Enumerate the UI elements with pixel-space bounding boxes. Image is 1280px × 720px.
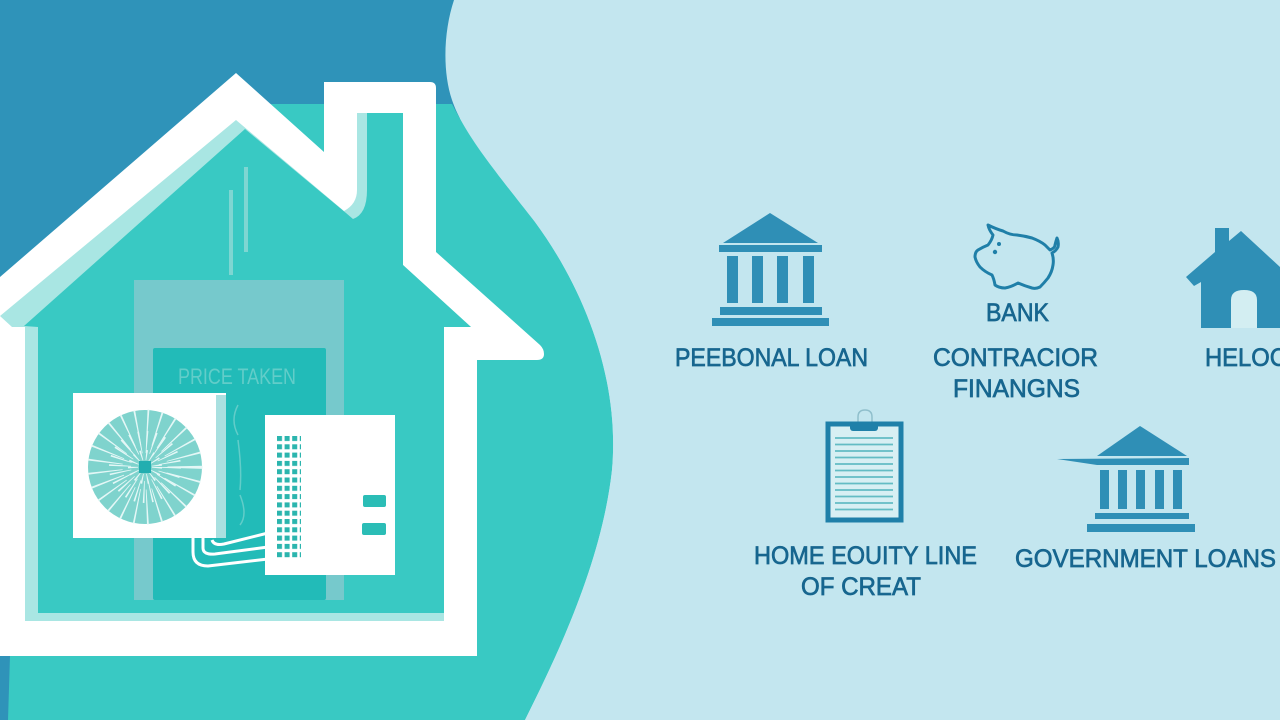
label: contractor financing: CONTRACIOR xyxy=(933,344,1098,372)
icon: piggy bank xyxy=(975,225,1058,288)
fan xyxy=(88,410,202,524)
house interior xyxy=(24,113,471,613)
indoor unit xyxy=(265,415,395,575)
indoor body xyxy=(265,415,395,575)
label: contractor financing xyxy=(933,344,1098,403)
label: personal loan: PEEBONAL LOAN xyxy=(675,344,868,372)
wall panel xyxy=(134,280,344,600)
roof inner shadow xyxy=(0,113,471,621)
background: light blob edge xyxy=(445,0,700,720)
label: government loans: GOVERNMENT LOANS xyxy=(1015,545,1276,573)
background: dark blue corner xyxy=(0,0,460,720)
icon: bank xyxy=(712,213,829,326)
label: bank: BANK xyxy=(986,299,1049,327)
label: home equity line of credit: OF CREAT xyxy=(801,573,921,601)
background: teal blob xyxy=(0,104,613,720)
house outline xyxy=(0,73,544,656)
icon: government bank xyxy=(1057,426,1195,532)
vent lines xyxy=(229,167,248,275)
pipes xyxy=(193,533,268,566)
vent dots xyxy=(277,436,301,560)
outdoor unit xyxy=(73,393,226,538)
buttons xyxy=(362,495,386,535)
label: home equity line of credit xyxy=(754,542,977,601)
house illustration xyxy=(0,73,544,656)
icon: clipboard xyxy=(828,410,901,520)
label: home equity line of credit: HOME EOUITY LINE xyxy=(754,542,977,570)
label: contractor financing: FINANGNS xyxy=(953,375,1080,403)
display squiggles xyxy=(234,405,244,525)
icon: house xyxy=(1186,228,1280,328)
unit side xyxy=(216,395,226,538)
dark wall display xyxy=(153,348,326,600)
unit body xyxy=(73,393,226,538)
display text: PRICE TAKEN xyxy=(178,364,296,389)
